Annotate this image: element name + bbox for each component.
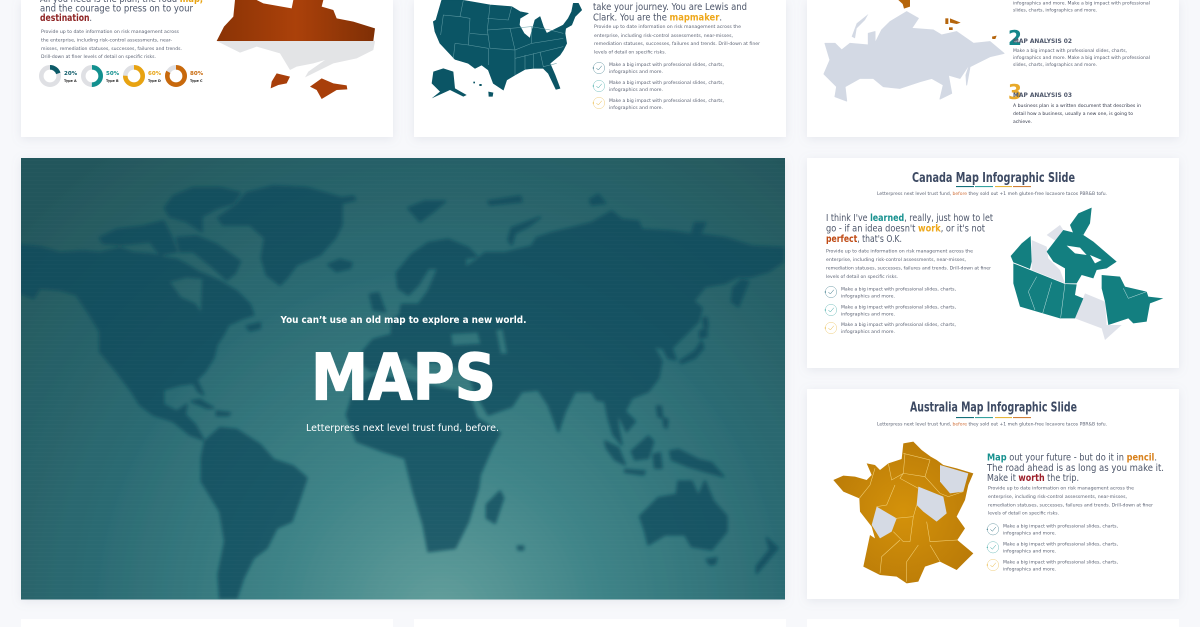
donut: Type B 50%: 50% [106, 71, 120, 77]
analysis 03: MAP ANALYSIS 03 [1013, 92, 1072, 99]
slide card: USA map [414, 0, 786, 137]
slide card: Australia titled France map [807, 389, 1179, 599]
checklist [593, 62, 725, 111]
analysis 02: infographics and more. Make a big impact with professional [1013, 55, 1150, 61]
heading: pencil quote: Make it worth the trip. [987, 473, 1079, 484]
donut: Type D 60%: Type D [148, 79, 161, 83]
heading: roadmap quote [40, 0, 203, 24]
checklist: Make a big impact with professional slides, charts, [841, 286, 957, 292]
donut: Type A 20%: 20% [64, 71, 78, 77]
heading: mapmaker quote: take your journey. You are Lewis and [593, 2, 747, 13]
body text: levels of detail on specific risks. [826, 274, 898, 280]
heading: pencil quote: The road ahead is as long as you make it. [986, 463, 1164, 474]
analysis 02: Make a big impact with professional slides, charts, [1013, 48, 1128, 54]
checklist: Make a big impact with professional slides, charts, [609, 80, 725, 86]
heading: roadmap quote: destination. [40, 13, 92, 24]
slide card: Russia map analysis [807, 0, 1179, 137]
body text: remediation statuses, successes, failures and trends. Drill-down at finer [826, 266, 991, 272]
heading: pencil quote [986, 453, 1164, 484]
hero title: MAPS [311, 342, 496, 416]
heading: mapmaker quote [593, 2, 747, 24]
body text: enterprise, including risk-control assessments, near-misses, [594, 33, 734, 39]
body text [594, 24, 760, 56]
slide card: Ukraine map with donuts [21, 0, 393, 137]
donut: Type D 60% [125, 67, 162, 85]
body text: Provide up to date information on risk management across the [594, 24, 741, 30]
heading: learned quote [826, 213, 993, 245]
donut: Type C 80%: Type C [190, 79, 203, 83]
checklist: infographics and more. [1003, 531, 1056, 537]
body text: levels of detail on specific risks. [988, 511, 1059, 517]
map: France regions [833, 442, 973, 583]
checklist: Make a big impact with professional slides, charts, [841, 304, 957, 310]
title: Australia Map Infographic Slide [910, 400, 1077, 416]
analysis 02 [1008, 26, 1150, 68]
body text: misses, remediation statuses, successes, failures and trends. [41, 46, 182, 52]
subtitle: Letterpress next level trust fund, before they sold out +1 meh gluten-free locavore tacos PBR&B tofu. [877, 422, 1107, 428]
body text [988, 485, 1153, 517]
bottom row of cropped slide cards [21, 619, 1179, 627]
checklist: infographics and more. [1003, 566, 1056, 572]
analysis 01 text [1013, 0, 1150, 14]
hero subtitle: Letterpress next level trust fund, before. [306, 423, 499, 434]
heading: learned quote: go - if an idea doesn't work, or it's not [826, 224, 985, 234]
checklist: infographics and more. [609, 69, 663, 75]
heading: learned quote: I think I've learned, really, just how to let [826, 213, 993, 224]
analysis 03: 3 [1008, 80, 1022, 104]
body text: Provide up to date information on risk management across [41, 29, 180, 35]
title underline [956, 417, 1031, 418]
checklist: Make a big impact with professional slides, charts, [1003, 524, 1119, 530]
body text [826, 249, 991, 280]
checklist: infographics and more. [609, 87, 663, 93]
analysis 03: A business plan is a written document that describes in [1013, 103, 1141, 109]
checklist: infographics and more. [1003, 549, 1056, 555]
map: United States [432, 0, 582, 98]
analysis 02: 2 [1008, 26, 1022, 50]
map: Russia [824, 0, 1004, 101]
checklist: Make a big impact with professional slides, charts, [609, 98, 725, 104]
checklist [825, 286, 957, 335]
analysis 02: MAP ANALYSIS 02 [1013, 38, 1072, 45]
checklist: Make a big impact with professional slides, charts, [1003, 559, 1119, 565]
world map [20, 186, 783, 598]
map: Canada [1011, 208, 1163, 340]
donut: Type A 20% [41, 67, 78, 85]
heading: learned quote: perfect, that's O.K. [826, 234, 902, 245]
subtitle: Letterpress next level trust fund, before they sold out +1 meh gluten-free locavore tacos PBR&B tofu. [877, 191, 1107, 197]
donut: Type D 60%: 60% [148, 71, 162, 77]
analysis 01 text: infographics and more. Make a big impact with professional [1013, 0, 1150, 6]
donut: Type C 80%: 80% [190, 71, 204, 77]
checklist: infographics and more. [841, 294, 895, 300]
donut: Type B 50%: Type B [106, 79, 119, 83]
body text: Drill-down at finer levels of detail on specific risks. [41, 54, 156, 60]
map: Ukraine [217, 0, 375, 99]
hero panel: MAPS title slide [20, 158, 785, 600]
title underline [956, 186, 1031, 187]
checklist: Make a big impact with professional slides, charts, [841, 322, 957, 328]
title: Canada Map Infographic Slide [912, 170, 1075, 186]
body text [41, 29, 182, 60]
body text: the enterprise, including risk-control assessments, near- [41, 37, 172, 43]
body text: Provide up to date information on risk management across the [988, 485, 1134, 491]
checklist [987, 524, 1119, 572]
heading: pencil quote: Map out your future - but do it in pencil. [987, 453, 1157, 464]
heading: roadmap quote: and the courage to press on to your [40, 4, 194, 14]
body text: remediation statuses, successes, failures and trends. Drill-down at finer [594, 41, 760, 47]
body text: enterprise, including risk-control assessments, near-misses, [826, 257, 967, 263]
donut: Type C 80% [167, 67, 204, 85]
analysis 02: slides, charts, infographics and more. [1013, 62, 1097, 68]
body text: levels of detail on specific risks. [594, 50, 666, 56]
body text: remediation statuses, successes, failures and trends. Drill-down at finer [988, 502, 1153, 508]
donut: Type A 20%: Type A [64, 79, 77, 83]
hero tagline: You can’t use an old map to explore a new world. [280, 315, 526, 326]
analysis 03: achieve. [1013, 119, 1032, 125]
checklist: Make a big impact with professional slides, charts, [609, 62, 725, 68]
scanline texture [21, 158, 785, 600]
analysis 03 [1008, 80, 1141, 125]
checklist: infographics and more. [841, 329, 895, 335]
checklist: Make a big impact with professional slides, charts, [1003, 542, 1119, 548]
heading: mapmaker quote: Clark. You are the mapmaker. [593, 12, 722, 24]
donut: Type B 50% [83, 67, 120, 85]
analysis 03: detail how a business, usually a new one, is going to [1013, 111, 1133, 117]
checklist: infographics and more. [841, 311, 895, 317]
analysis 01 text: slides, charts, infographics and more. [1013, 8, 1097, 14]
body text: enterprise, including risk-control assessments, near-misses, [988, 494, 1128, 500]
checklist: infographics and more. [609, 105, 663, 111]
slide card: Canada map [807, 158, 1179, 368]
body text: Provide up to date information on risk management across the [826, 249, 973, 255]
